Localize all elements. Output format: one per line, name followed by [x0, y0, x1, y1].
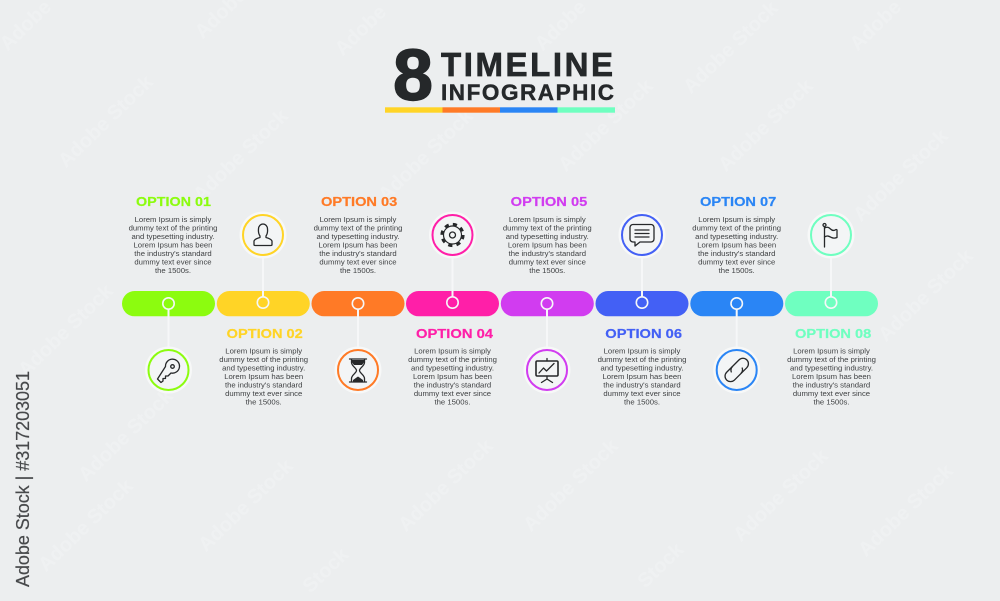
text: Adobe Stock: [554, 75, 658, 176]
timeline bar: option 03: [312, 291, 404, 316]
text: Adobe Stock: [874, 245, 978, 346]
text: Adobe Stock: [729, 445, 833, 546]
connector: option 07: [731, 298, 742, 349]
timeline bar: option 01: [122, 291, 215, 316]
heading: option 07: OPTION 07: [700, 194, 776, 209]
text block: option 02: the industry's standard: [225, 380, 302, 389]
heading: option 01: OPTION 01: [136, 194, 211, 209]
icon: gear: [429, 212, 476, 258]
timeline bar: option 05: [501, 291, 594, 316]
text block: option 01: and typesetting industry.: [131, 232, 215, 241]
text block: option 05: dummy text ever since: [509, 257, 586, 266]
text: Adobe Stock: [194, 455, 298, 556]
timeline bar: option 04: [406, 291, 499, 316]
panel: option 01: [122, 194, 217, 394]
panel: option 05: [501, 194, 594, 394]
text block: option 02: the 1500s.: [246, 397, 282, 406]
text block: option 07: Lorem Ipsum has been: [697, 240, 776, 249]
heading: option 08: OPTION 08: [795, 326, 871, 341]
text block: option 02: dummy text of the printing: [219, 355, 308, 364]
text block: option 08: the industry's standard: [793, 380, 870, 389]
connector: option 01: [163, 298, 174, 349]
text block: option 06: the 1500s.: [624, 397, 660, 406]
timeline bar: option 08: [785, 291, 878, 316]
text: Adobe Stock: [394, 435, 498, 536]
text block: option 06: dummy text ever since: [603, 389, 681, 398]
text block: option 01: Lorem Ipsum has been: [134, 240, 212, 249]
panel: option 08: [785, 212, 878, 406]
text block: option 07: Lorem Ipsum is simply: [698, 215, 775, 224]
title numeral 8: 8: [393, 36, 433, 116]
text block: option 08: Lorem Ipsum is simply: [793, 346, 870, 356]
text block: option 04: dummy text ever since: [414, 389, 491, 398]
text block: option 08: dummy text ever since: [793, 389, 870, 398]
panel: option 03: [312, 194, 404, 394]
text: Adobe Stock: [679, 0, 783, 98]
title line: timeline: TIMELINE: [441, 46, 613, 83]
heading: option 06: OPTION 06: [605, 326, 682, 341]
text block: option 03: dummy text ever since: [319, 257, 397, 266]
text block: option 07: the industry's standard: [698, 249, 775, 258]
text: Adobe: [331, 1, 391, 60]
connector: option 03: [352, 298, 364, 349]
text block: option 06: Lorem Ipsum has been: [603, 372, 681, 381]
text: Adobe Stock: [54, 71, 158, 172]
text block: option 05: Lorem Ipsum has been: [508, 240, 587, 249]
text block: option 04: Lorem Ipsum is simply: [414, 346, 491, 356]
text block: option 06: and typesetting industry.: [600, 364, 684, 372]
text: Adobe Stock: [34, 475, 138, 576]
connector: option 08: [825, 257, 837, 308]
text block: option 06: dummy text of the printing: [598, 355, 686, 364]
text block: option 07: dummy text ever since: [698, 257, 775, 266]
timeline bar: option 02: [217, 291, 310, 316]
text block: option 06: Lorem Ipsum is simply: [604, 346, 681, 356]
text block: option 03: the 1500s.: [340, 266, 376, 275]
title: [385, 36, 615, 116]
text block: option 03: and typesetting industry.: [316, 232, 400, 241]
text block: option 01: dummy text ever since: [134, 257, 212, 266]
text block: option 01: the 1500s.: [155, 266, 191, 275]
timeline bar: option 07: [690, 291, 783, 316]
text: Adobe Stock: [14, 280, 118, 381]
text: Adobe Stock: [849, 125, 953, 226]
icon: hourglass: [334, 346, 382, 394]
text block: option 04: the industry's standard: [414, 380, 491, 389]
heading: option 05: OPTION 05: [511, 194, 587, 209]
text: Adobe Stock: [374, 105, 478, 206]
icon: speech bubble: [618, 212, 666, 258]
connector: option 05: [541, 298, 553, 349]
text block: option 05: the industry's standard: [509, 249, 586, 258]
text: Adobe Stock: [714, 75, 818, 176]
text block: option 04: and typesetting industry.: [411, 364, 494, 372]
text block: option 04: the 1500s.: [434, 397, 471, 406]
text: Stock: [299, 543, 354, 598]
heading: option 04: OPTION 04: [416, 326, 494, 341]
text block: option 08: the 1500s.: [813, 397, 850, 406]
panel: option 07: [690, 194, 783, 394]
heading: option 02: OPTION 02: [227, 326, 303, 341]
stock id credit: Adobe Stock | #317203051: [13, 371, 33, 587]
timeline bar: option 06: [596, 291, 688, 316]
text: Adobe Stock: [74, 385, 178, 486]
text block: option 03: dummy text of the printing: [314, 224, 402, 232]
text block: option 08: dummy text of the printing: [787, 355, 876, 364]
text block: option 05: the 1500s.: [529, 266, 565, 275]
heading: option 03: OPTION 03: [321, 194, 397, 209]
connector: option 04: [447, 257, 458, 308]
icon: flag: [808, 212, 854, 258]
text block: option 08: and typesetting industry.: [790, 364, 873, 372]
icon: key: [145, 346, 192, 394]
text block: option 04: dummy text of the printing: [408, 355, 497, 364]
panel: option 04: [406, 212, 499, 406]
text block: option 05: dummy text of the printing: [503, 224, 592, 232]
text block: option 02: Lorem Ipsum has been: [224, 372, 303, 381]
icon: person: [240, 212, 286, 258]
text block: option 06: the industry's standard: [603, 380, 681, 389]
text block: option 03: Lorem Ipsum has been: [319, 240, 397, 249]
text block: option 03: the industry's standard: [319, 249, 397, 258]
connector: option 06: [636, 257, 648, 308]
text: Adobe Stock: [519, 435, 623, 536]
panel: option 06: [596, 212, 688, 406]
text block: option 05: Lorem Ipsum is simply: [509, 215, 586, 224]
text block: option 01: dummy text of the printing: [129, 224, 217, 232]
connector: option 02: [257, 257, 269, 308]
text block: option 02: Lorem Ipsum is simply: [225, 346, 302, 356]
text block: option 05: and typesetting industry.: [506, 232, 589, 241]
text block: option 01: the industry's standard: [134, 249, 212, 258]
title underline colour bar: [385, 107, 615, 113]
text block: option 04: Lorem Ipsum has been: [413, 372, 492, 381]
text block: option 01: Lorem Ipsum is simply: [135, 215, 212, 224]
text block: option 02: and typesetting industry.: [222, 364, 305, 372]
text: Stock: [634, 538, 689, 593]
text block: option 03: Lorem Ipsum is simply: [320, 215, 397, 224]
icon: chain link: [713, 346, 760, 394]
text block: option 07: and typesetting industry.: [695, 232, 778, 241]
text block: option 02: dummy text ever since: [225, 389, 302, 398]
text: Adobe Stock: [854, 460, 958, 561]
text block: option 08: Lorem Ipsum has been: [792, 372, 871, 381]
text block: option 07: the 1500s.: [719, 266, 755, 275]
icon: presentation board: [524, 346, 570, 394]
panel: option 02: [217, 212, 310, 406]
text: Adobe Stock: [189, 105, 293, 206]
text block: option 07: dummy text of the printing: [692, 224, 781, 232]
title line: infographic: INFOGRAPHIC: [441, 80, 614, 105]
